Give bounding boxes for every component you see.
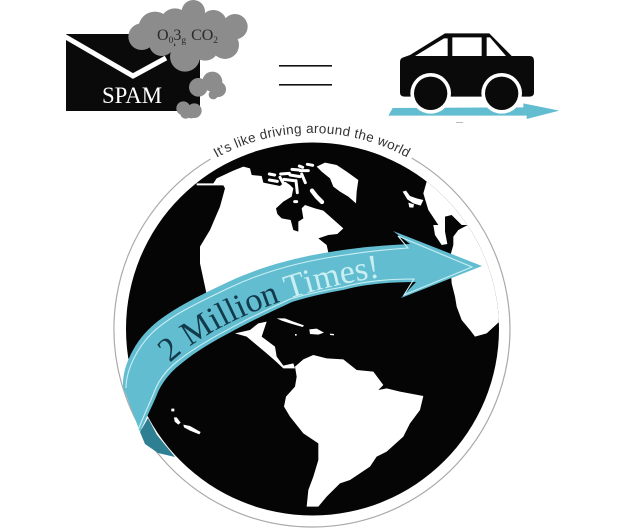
ribbon inner highlight — [126, 236, 472, 430]
ribbon fold shadow — [140, 418, 175, 457]
envelope flap line — [64, 36, 166, 76]
Mexico and Central America — [235, 322, 295, 368]
infographic canvas — [66, 0, 560, 528]
cloud label: O03g CO2: 2 — [213, 36, 218, 46]
small dash under car — [456, 122, 463, 123]
equals sign — [279, 65, 332, 86]
Pacific islands — [171, 409, 201, 434]
UK and Ireland — [403, 191, 423, 208]
envelope label: SPAM: SPAM — [102, 83, 162, 108]
South America — [284, 355, 423, 507]
car body — [400, 33, 534, 97]
continents — [171, 162, 499, 507]
small emission cloud — [189, 72, 226, 99]
cloud label: O03g CO2: g — [181, 36, 186, 46]
icon: car on arrow — [388, 33, 559, 119]
cloud label: O03g CO2: 3 — [173, 27, 181, 44]
cloud label: O03g CO2: 0 — [169, 36, 174, 46]
ribbon band — [123, 231, 482, 432]
envelope body — [66, 34, 200, 111]
road arrow — [388, 103, 559, 119]
rear wheel — [410, 73, 451, 114]
Europe and Africa — [423, 182, 499, 337]
car windows — [415, 37, 506, 56]
front wheel — [481, 73, 522, 114]
globe outer ring — [114, 158, 510, 527]
globe disc — [126, 142, 499, 516]
large emission cloud — [128, 0, 248, 72]
ribbon label: 2 Million Times!: 2 Million Times! — [157, 256, 377, 362]
Arctic islands — [269, 164, 322, 202]
icon: spam envelope with emission clouds — [64, 0, 248, 119]
ribbon arrow — [122, 231, 482, 457]
cloud label: O03g CO2: O — [157, 27, 169, 44]
cloud label: O03g CO2: CO — [191, 27, 213, 44]
smallest emission cloud — [176, 101, 202, 119]
globe — [126, 142, 540, 516]
Greenland — [317, 163, 358, 203]
North America — [197, 167, 343, 300]
Caribbean islands — [277, 318, 334, 336]
curved caption: It's like driving around the world — [213, 125, 411, 158]
